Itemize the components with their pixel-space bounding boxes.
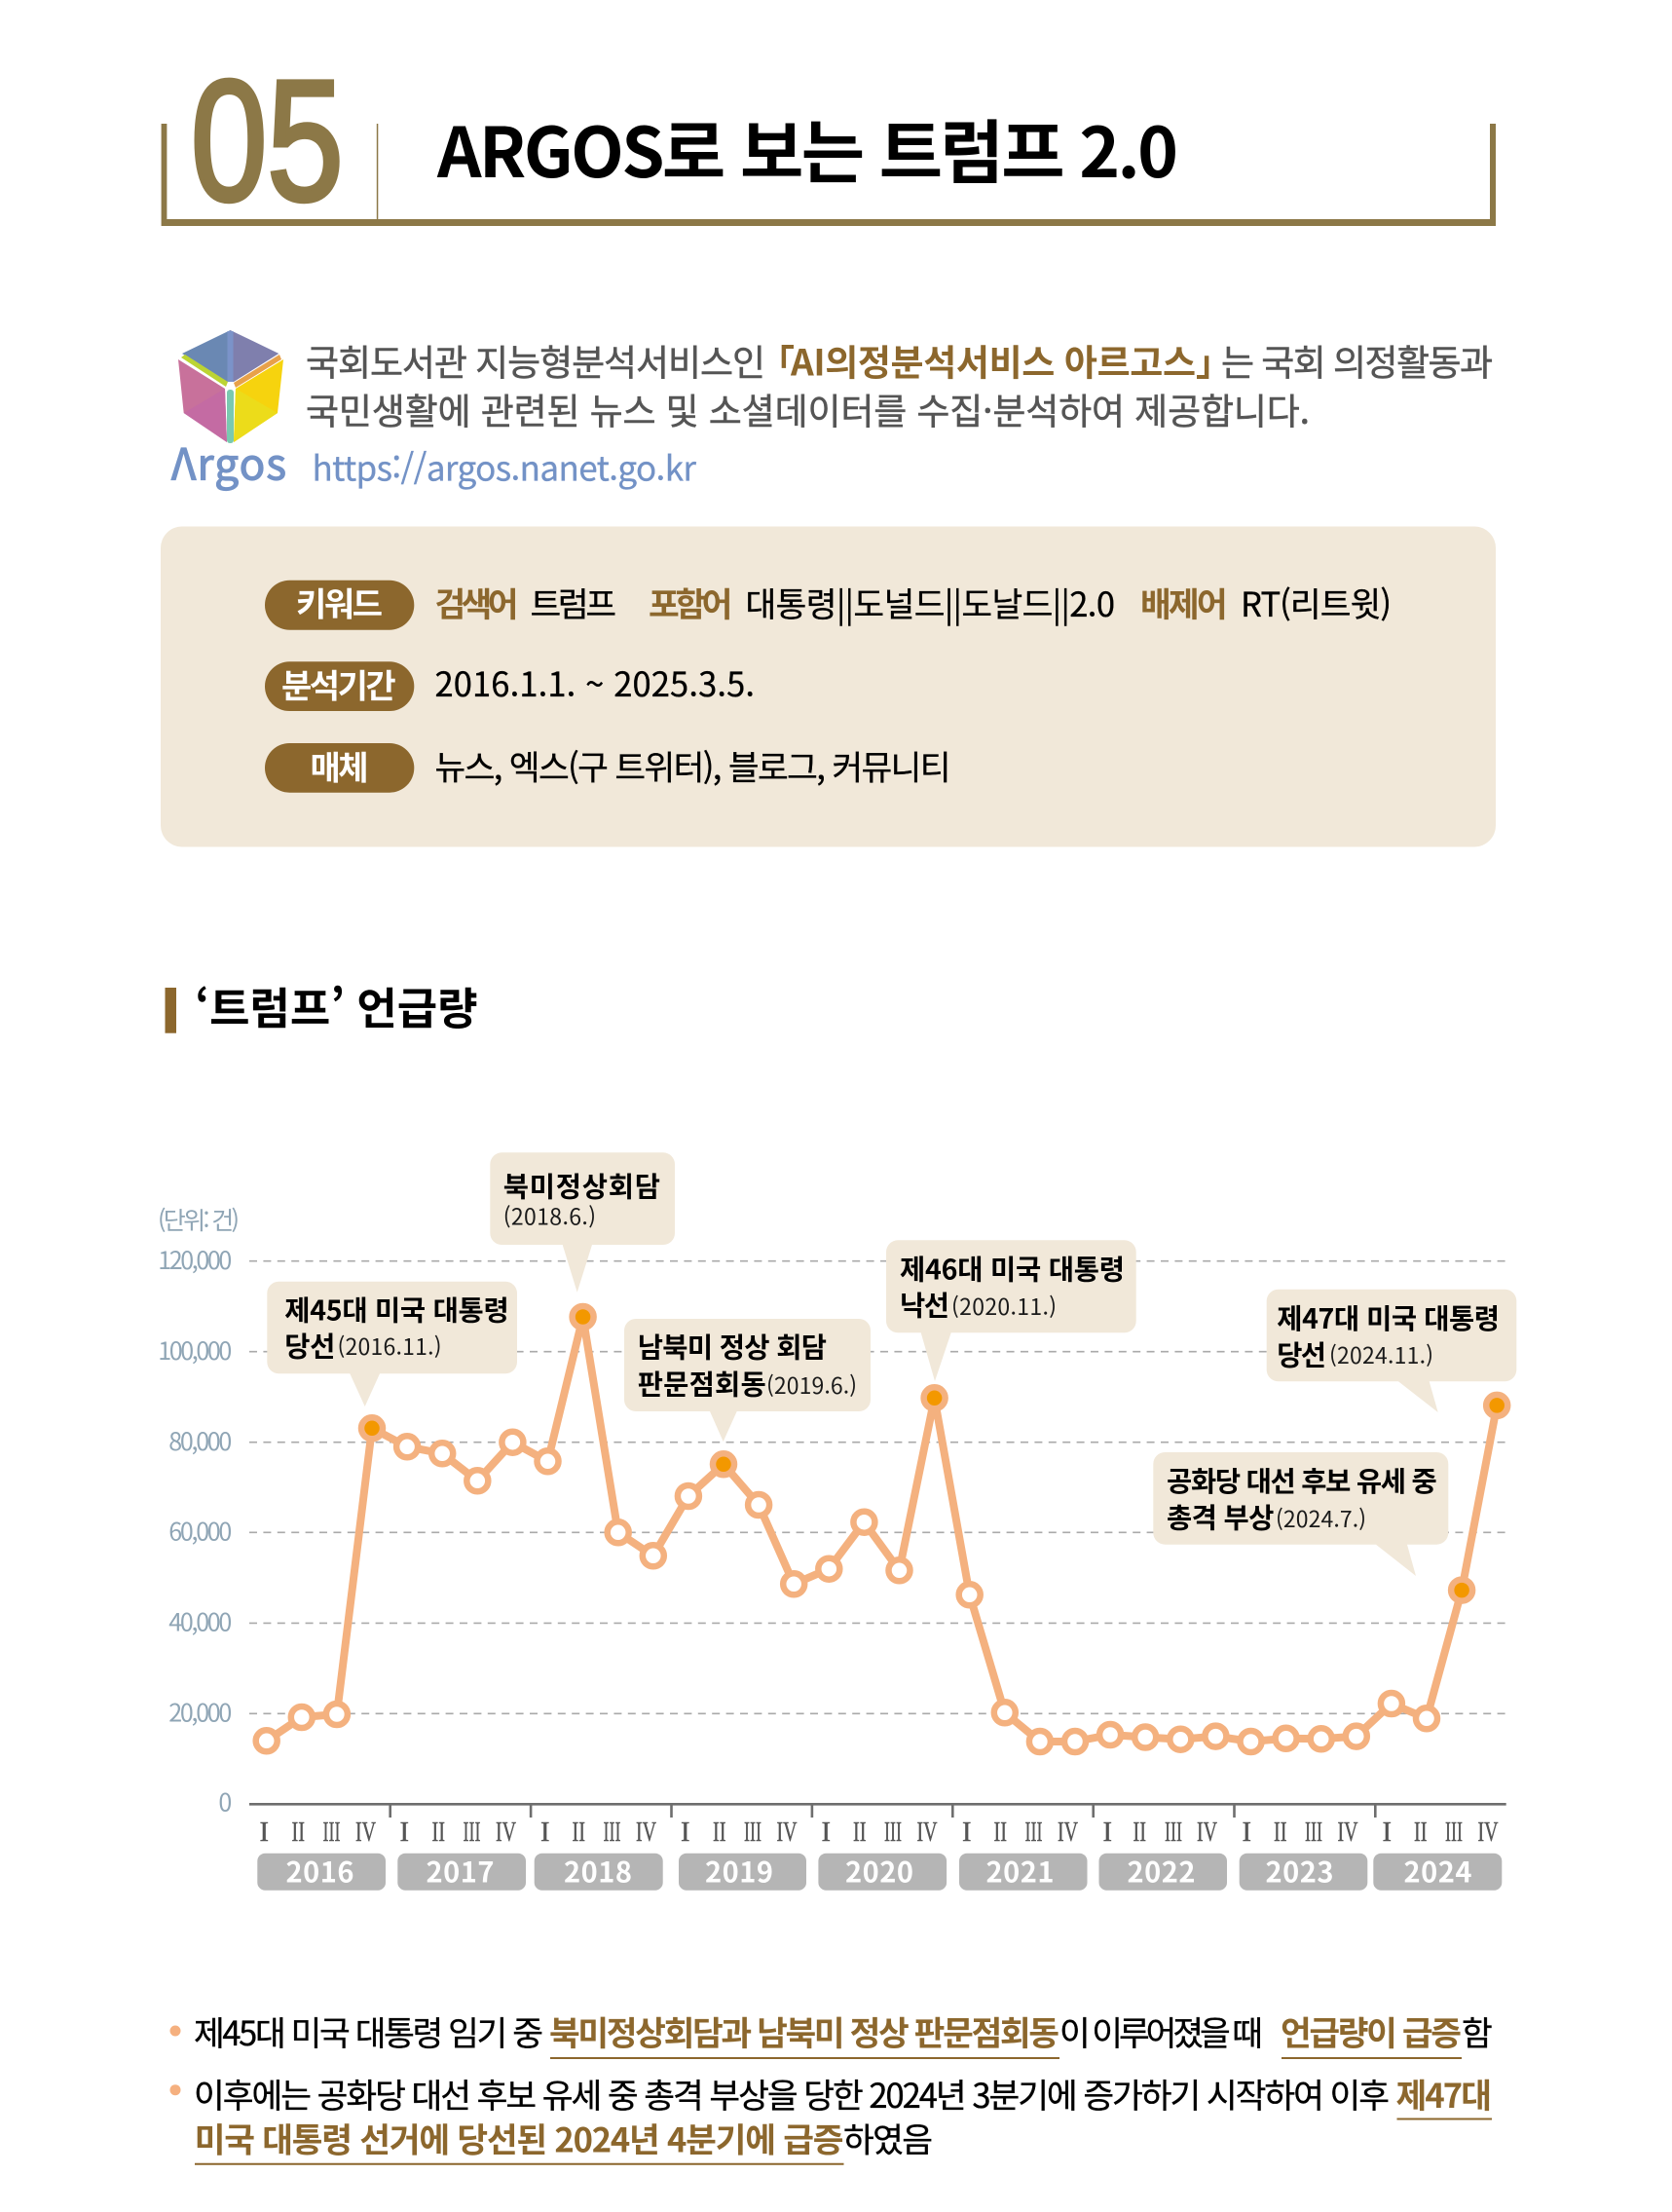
data line (267, 1317, 1497, 1742)
callout: inter-Korean US Panmunjom meeting: 판문점회동 (638, 1364, 766, 1403)
quarter labels: III (884, 1818, 902, 1848)
quarter labels: IV (777, 1818, 797, 1848)
description line 1 (306, 333, 1493, 386)
y axis labels: 0 (218, 1784, 232, 1819)
quarter labels: III (1024, 1818, 1042, 1848)
row: keywords: 트럼프 (530, 578, 616, 626)
bullet note 2: 미국 대통령 선거에 당선된 2024년 4분기에 급증 (195, 2114, 843, 2162)
quarter labels: II (993, 1818, 1007, 1848)
year labels: 2017 (427, 1851, 495, 1892)
callout: North Korea-US summit (490, 1152, 675, 1293)
quarter labels: I (540, 1818, 549, 1848)
pill: media (265, 742, 414, 793)
bullet note 1: 제45대 미국 대통령 임기 중 (194, 2006, 543, 2055)
heading: Trump mentions: ‘트럼프’ 언급량 (195, 974, 477, 1036)
quarter labels: IV (496, 1818, 516, 1848)
year labels: 2024 (1404, 1851, 1472, 1892)
quarter labels: IV (355, 1818, 376, 1848)
year labels: 2021 (985, 1851, 1054, 1892)
quarter labels: II (432, 1818, 445, 1848)
year labels: 2019 (705, 1851, 773, 1892)
bullet note 1: 북미정상회담과 남북미 정상 판문점회동 (549, 2006, 1059, 2055)
callout: 45th president elected: 제45대 미국 대통령 (284, 1290, 509, 1329)
quarter labels: III (464, 1818, 481, 1848)
quarter labels: III (744, 1818, 762, 1848)
callout: inter-Korean US Panmunjom meeting: 남북미 정상 회담 (638, 1327, 827, 1366)
pill: keywords: 키워드 (296, 579, 383, 625)
quarter labels: I (681, 1818, 689, 1848)
description line 1: 」 (1196, 333, 1232, 386)
row: period: 2016.1.1. ~ 2025.3.5. (434, 657, 755, 706)
row: media: 뉴스, 엑스(구 트위터), 블로그, 커뮤니티 (434, 741, 950, 790)
quarter labels: III (604, 1818, 621, 1848)
intro: Argos logo and description (171, 330, 1493, 493)
quarter labels: IV (1478, 1818, 1498, 1848)
quarter labels: III (1305, 1818, 1322, 1848)
callout: 45th president elected (267, 1282, 517, 1406)
panel: search conditions (161, 526, 1496, 847)
section number: 05 (191, 45, 344, 237)
panel background (161, 526, 1496, 847)
callout: 47th president elected (1267, 1290, 1516, 1412)
callout: 47th president elected: 당선 (1277, 1334, 1326, 1373)
URL: https://argos.nanet.go.kr (312, 442, 696, 491)
y axis labels: 20,000 (168, 1695, 232, 1730)
y axis labels: 100,000 (158, 1332, 232, 1368)
quarter labels: II (1133, 1818, 1146, 1848)
quarter labels: I (962, 1818, 972, 1848)
row: period (265, 657, 755, 711)
quarter labels: I (822, 1818, 831, 1848)
pill: period: 분석기간 (281, 660, 396, 707)
callout: 46th president defeated: 낙선 (900, 1284, 949, 1325)
callout: 45th president elected: 당선 (284, 1325, 335, 1366)
regular data points (256, 1432, 1437, 1752)
callout: 45th president elected: (2016.11.) (337, 1329, 442, 1362)
callout: inter-Korean US Panmunjom meeting (624, 1319, 871, 1442)
bullet note 2 (169, 2069, 1492, 2164)
logo wordmark: Λrgos (171, 431, 286, 493)
quarter labels: IV (917, 1818, 937, 1848)
quarter labels: IV (1197, 1818, 1217, 1848)
unit label: (단위: 건) (158, 1202, 240, 1237)
row: keywords: 대통령||도널드||도날드||2.0 (746, 578, 1115, 626)
row: keywords (265, 578, 1392, 630)
callout: candidate shooting: (2024.7.) (1276, 1501, 1366, 1534)
row: keywords: RT(리트윗) (1241, 578, 1392, 626)
quarter labels: II (573, 1818, 585, 1848)
quarter labels: I (259, 1818, 269, 1848)
callout: North Korea-US summit: 북미정상회담 (503, 1165, 660, 1206)
bullet note 1: 언급량이 급증 (1281, 2006, 1462, 2055)
y axis labels (158, 1242, 232, 1819)
quarter labels: III (1445, 1818, 1463, 1848)
highlighted data points (361, 1306, 1507, 1601)
quarter labels: IV (636, 1818, 656, 1848)
pill: keywords (265, 579, 414, 630)
row: keywords: 배제어 (1140, 578, 1228, 626)
quarter labels: IV (1058, 1818, 1078, 1848)
bullet note 1: 이 이루어졌을 때 (1059, 2006, 1263, 2055)
callout: inter-Korean US Panmunjom meeting: (2019.6.) (766, 1368, 857, 1401)
notes: bullet summary (169, 2006, 1493, 2164)
row: keywords: 포함어 (649, 578, 732, 626)
quarter labels: II (292, 1818, 305, 1848)
y axis labels: 40,000 (168, 1603, 232, 1638)
header frame (162, 124, 1496, 226)
quarter labels: I (399, 1818, 409, 1848)
callout: 47th president elected: (2024.11.) (1329, 1337, 1433, 1370)
year labels: 2022 (1128, 1851, 1196, 1892)
callout: 46th president defeated (886, 1240, 1136, 1381)
quarter labels: I (1102, 1818, 1112, 1848)
header: section number and title (162, 45, 1496, 237)
description line 1: 「 (759, 333, 795, 386)
bullet note 2: 이후에는 공화당 대선 후보 유세 중 총격 부상을 당한 2024년 3분기에 증가하기 시작하여 이후 (194, 2069, 1390, 2118)
bullet note 2: 하였음 (843, 2114, 933, 2162)
quarter labels: II (1414, 1818, 1428, 1848)
y axis labels: 120,000 (158, 1242, 232, 1277)
description line 1: AI의정분석서비스 아르고스 (790, 333, 1196, 386)
callout: 46th president defeated: (2020.11.) (951, 1289, 1057, 1322)
quarter labels: II (713, 1818, 726, 1848)
line chart: Trump mentions by quarter (158, 1152, 1516, 1892)
bullet note 1: 함 (1462, 2006, 1493, 2055)
callout: candidate shooting (1153, 1452, 1448, 1576)
title: ARGOS로 보는 트럼프 2.0 (436, 98, 1178, 198)
quarter labels (259, 1818, 1498, 1848)
year labels: 2023 (1266, 1851, 1334, 1892)
year labels: 2016 (286, 1851, 354, 1892)
quarter labels: I (1243, 1818, 1251, 1848)
row: keywords: 검색어 (434, 578, 518, 626)
description line 1: 국회도서관 지능형분석서비스인 (306, 333, 765, 386)
description line 2: 국민생활에 관련된 뉴스 및 소셜데이터를 수집·분석하여 제공합니다. (306, 382, 1310, 434)
year labels (257, 1851, 1502, 1892)
callout: 46th president defeated: 제46대 미국 대통령 (900, 1249, 1125, 1288)
y axis labels: 80,000 (168, 1423, 232, 1458)
icon: Argos cube logo (178, 330, 283, 443)
quarter labels: III (1165, 1818, 1182, 1848)
callout: candidate shooting: 총격 부상 (1167, 1496, 1274, 1537)
quarter labels: I (1383, 1818, 1392, 1848)
description line 1: 는 국회 의정활동과 (1221, 333, 1493, 386)
quarter labels: II (1274, 1818, 1287, 1848)
callout: candidate shooting: 공화당 대선 후보 유세 중 (1167, 1460, 1437, 1500)
bullet note 1 (169, 2006, 1493, 2058)
callout: North Korea-US summit: (2018.6.) (503, 1199, 596, 1232)
bullet note 2: 제47대 (1396, 2069, 1492, 2118)
quarter labels: IV (1338, 1818, 1357, 1848)
quarter labels: III (323, 1818, 341, 1848)
x axis (249, 1804, 1506, 1818)
callout: 47th president elected: 제47대 미국 대통령 (1277, 1297, 1500, 1337)
year labels: 2020 (845, 1851, 913, 1892)
year labels: 2018 (564, 1851, 632, 1892)
y axis labels: 60,000 (168, 1514, 232, 1549)
quarter labels: II (853, 1818, 867, 1848)
pill: media: 매체 (310, 742, 368, 789)
